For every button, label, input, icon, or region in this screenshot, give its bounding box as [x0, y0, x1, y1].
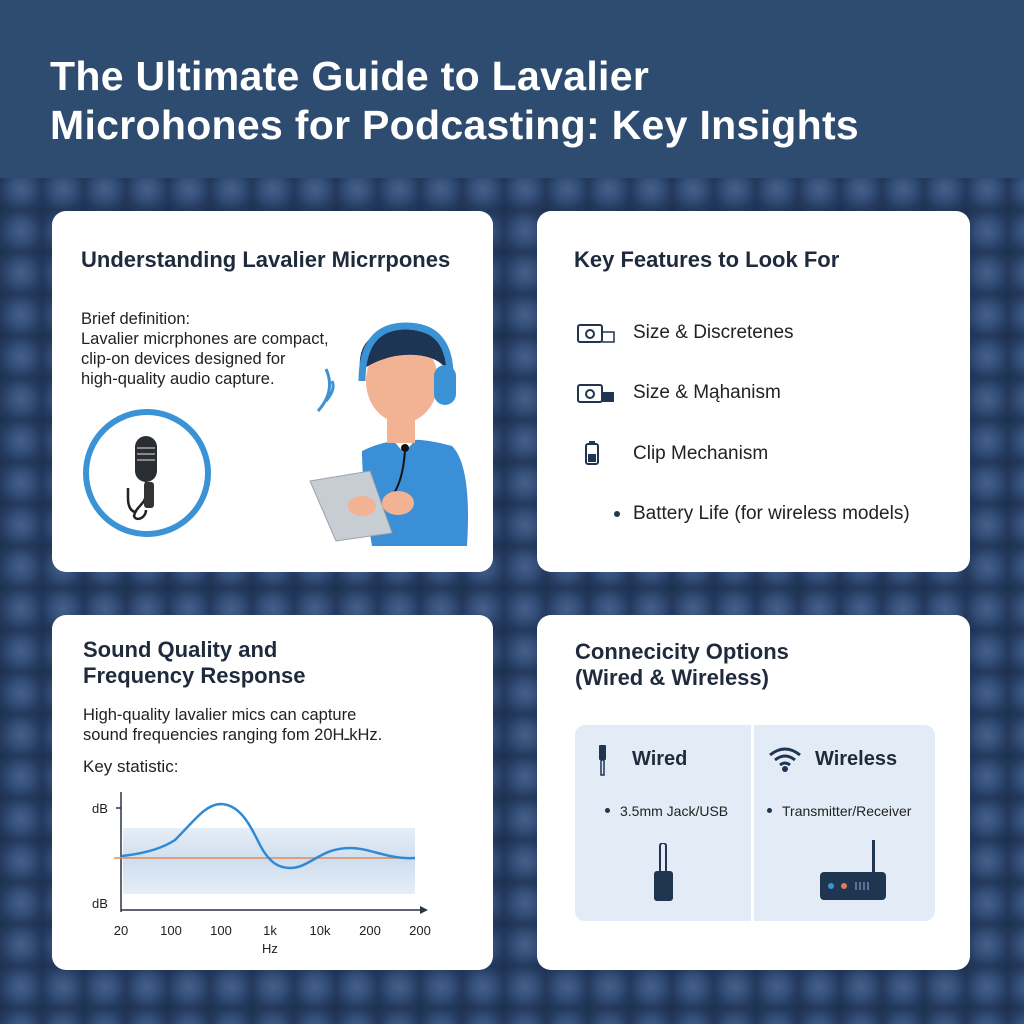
heading	[575, 639, 789, 690]
comparison box	[575, 725, 935, 921]
definition text: Brief definition:	[81, 310, 190, 328]
chart: frequency response: 1k	[263, 923, 277, 938]
definition text: high-quality audio capture.	[81, 370, 275, 388]
feature 4: Battery Life (for wireless models)	[633, 503, 910, 524]
panel: sound quality	[52, 615, 493, 970]
chart: frequency response: 200	[359, 923, 381, 938]
panel: key features	[537, 211, 970, 572]
description: High-quality lavalier mics can capture	[83, 706, 356, 724]
chart: frequency response	[92, 792, 431, 956]
header	[0, 0, 1024, 178]
illustration: person with headphones	[309, 322, 468, 546]
column: wired	[599, 745, 728, 901]
definition text: Lavalier micrphones are compact,	[81, 330, 329, 348]
panel: connectivity	[537, 615, 970, 970]
heading: Sound Quality and	[83, 637, 277, 662]
chart: frequency response: 200	[409, 923, 431, 938]
heading	[83, 637, 306, 688]
chart: frequency response: 100	[160, 923, 182, 938]
panel: understanding	[52, 211, 493, 572]
stat label: Key statistic:	[83, 757, 178, 776]
definition text	[81, 310, 329, 388]
description	[83, 706, 382, 744]
heading: Understanding Lavalier Micrrpones	[81, 247, 450, 272]
column: wireless: Transmitter/Receiver	[782, 803, 911, 819]
heading: Frequency Response	[83, 663, 306, 688]
icon: mic circle	[83, 409, 211, 537]
column: wired: Wired	[632, 748, 687, 770]
feature 3	[585, 441, 768, 465]
feature 2: Size & Mąhanism	[633, 382, 781, 403]
feature 1: Size & Discretenes	[633, 322, 794, 343]
heading: (Wired & Wireless)	[575, 665, 769, 690]
column: wireless	[767, 748, 912, 900]
title: Microhones for Podcasting: Key Insights	[50, 102, 859, 148]
column: wired: 3.5mm Jack/USB	[620, 803, 728, 819]
chart: frequency response: dB	[92, 801, 108, 816]
title: The Ultimate Guide to Lavalier	[50, 53, 649, 99]
chart: frequency response: 20	[114, 923, 128, 938]
chart: frequency response: Hz	[262, 941, 278, 956]
chart: frequency response: dB	[92, 896, 108, 911]
title	[50, 53, 859, 148]
chart: frequency response: 10k	[310, 923, 331, 938]
heading: Key Features to Look For	[574, 247, 839, 272]
column: wireless: Wireless	[815, 748, 897, 770]
feature 3: Clip Mechanism	[633, 443, 768, 464]
description: sound frequencies ranging fom 20HـkHz.	[83, 726, 382, 744]
definition text: clip-on devices designed for	[81, 350, 286, 368]
chart: frequency response: 100	[210, 923, 232, 938]
heading: Connecicity Options	[575, 639, 789, 664]
